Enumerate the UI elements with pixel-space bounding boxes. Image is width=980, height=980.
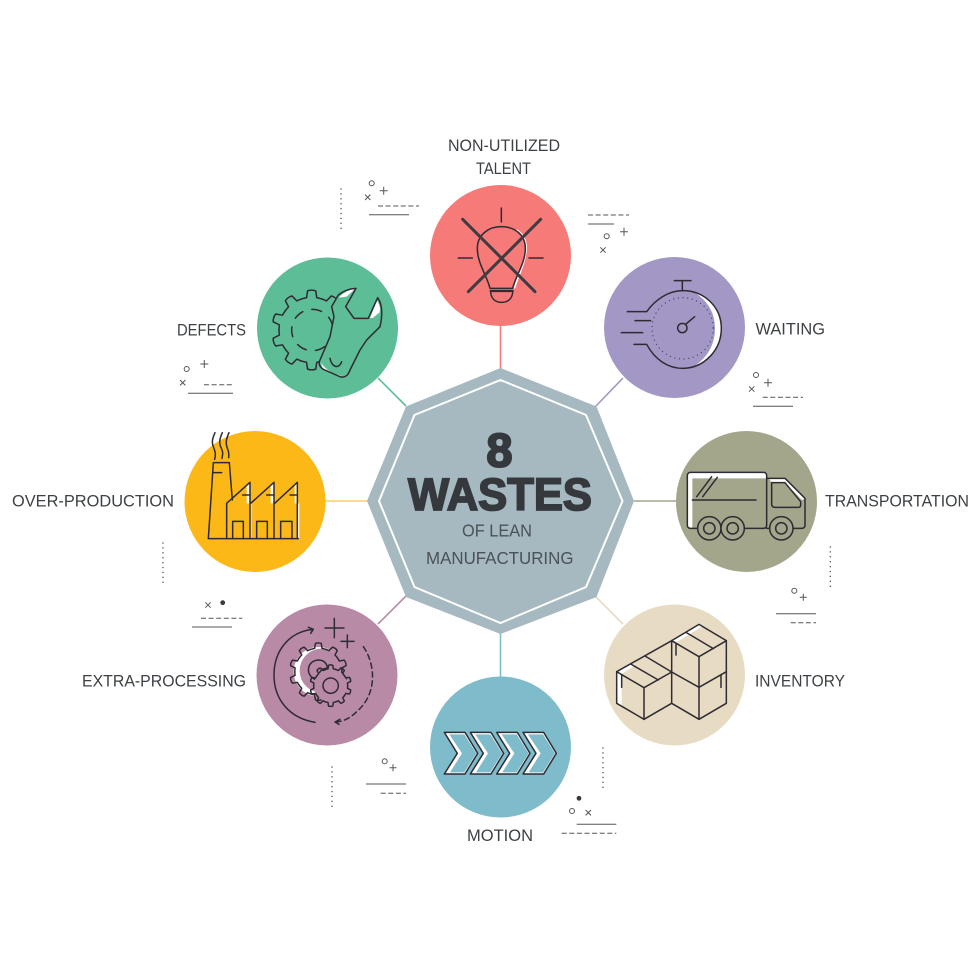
panel: over-production (12, 431, 326, 572)
label: non-utilized talent: TALENT (476, 159, 531, 178)
label: transportation: TRANSPORTATION (825, 492, 969, 510)
decoration: waiting marks (749, 372, 803, 406)
panel: non-utilized talent (430, 136, 571, 326)
icon: stopwatch (621, 281, 721, 368)
icon: crossed light bulb (458, 208, 543, 302)
label: defects: DEFECTS (177, 320, 246, 340)
subtitle: manufacturing: MANUFACTURING (426, 548, 574, 568)
icon: factory (208, 433, 299, 539)
icon: gear and wrench (271, 288, 382, 377)
connector lines (325, 326, 677, 677)
title: wastes: WASTES (408, 469, 592, 520)
label: extra-processing: EXTRA-PROCESSING (82, 672, 246, 690)
panel: defects (177, 258, 398, 398)
label: non-utilized talent (448, 136, 560, 178)
icon: stacked boxes (617, 624, 726, 719)
panel: motion (430, 676, 571, 845)
icon: gears with arrows (274, 618, 373, 724)
icon: truck (687, 472, 805, 540)
decoration: transportation marks (776, 547, 830, 623)
subtitle: of lean: OF LEAN (462, 520, 532, 540)
panel: transportation (676, 431, 969, 572)
label: over-production: OVER-PRODUCTION (12, 492, 174, 510)
panel: inventory (604, 604, 845, 746)
decoration: defects marks (180, 360, 233, 393)
label: non-utilized talent: NON-UTILIZED (448, 136, 560, 155)
decoration: extra-processing marks (332, 759, 406, 807)
panel: extra-processing (82, 604, 398, 746)
decoration: over-production marks (163, 543, 242, 627)
label: inventory: INVENTORY (755, 672, 845, 690)
decoration: top left marks (341, 181, 419, 229)
central octagon (367, 368, 634, 634)
label: waiting: WAITING (756, 320, 825, 338)
label: motion: MOTION (467, 826, 533, 845)
icon: chevrons (444, 732, 556, 774)
decoration: motion marks (562, 748, 616, 833)
title: 8: 8 (486, 424, 513, 476)
panel: waiting (604, 257, 825, 398)
decoration: top right marks (588, 215, 629, 253)
